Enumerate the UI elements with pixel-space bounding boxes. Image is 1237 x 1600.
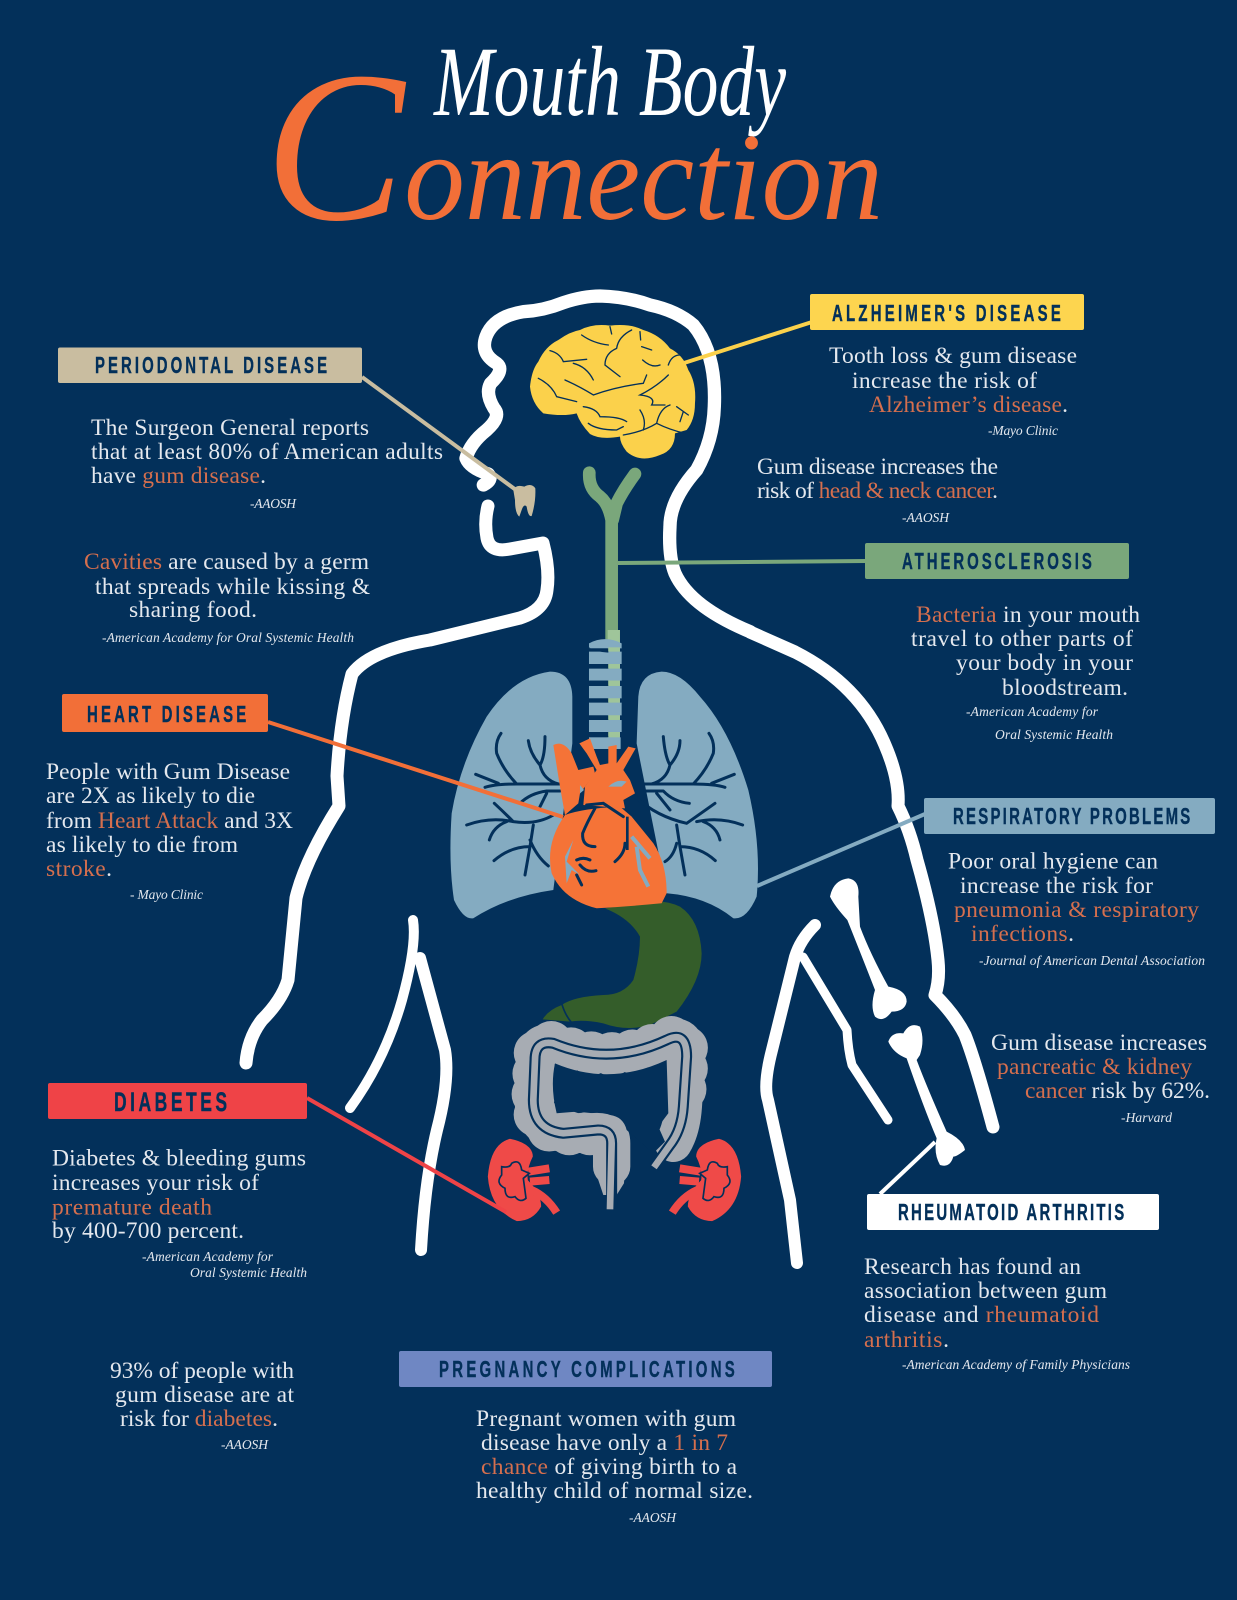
text: pancreatic and kidney cancer bbox=[991, 1030, 1210, 1125]
text: bacteria: your body in your bbox=[956, 650, 1133, 676]
text: head and neck cancer: risk of head & neck cancer. bbox=[757, 478, 998, 504]
text: premature death: premature death bbox=[52, 1194, 212, 1220]
text: bacteria: -American Academy for bbox=[966, 704, 1099, 719]
text: rheumatoid research: -American Academy of Family Physicians bbox=[902, 1357, 1130, 1372]
label: atherosclerosis bbox=[865, 543, 1129, 579]
text: tooth loss bbox=[829, 343, 1077, 438]
text: risk for diabetes: risk for diabetes. bbox=[120, 1406, 278, 1432]
text: rheumatoid research bbox=[864, 1254, 1130, 1372]
text: pregnancy: chance of giving birth to a bbox=[481, 1454, 738, 1480]
icon: bones bbox=[830, 878, 965, 1166]
icon: artery bbox=[589, 473, 635, 642]
label: heart disease bbox=[62, 694, 268, 732]
text: pregnancy: -AAOSH bbox=[629, 1510, 677, 1525]
text: heart attack: are 2X as likely to die bbox=[46, 783, 255, 809]
text: rheumatoid research: association between gum bbox=[864, 1278, 1107, 1304]
icon: stomach bbox=[543, 901, 702, 1028]
text: bacteria: travel to other parts of bbox=[911, 626, 1133, 652]
text: heart attack: People with Gum Disease bbox=[46, 759, 290, 785]
text: premature death: Diabetes & bleeding gums bbox=[52, 1146, 306, 1172]
text: bacteria bbox=[911, 602, 1140, 742]
text: pancreatic and kidney cancer: cancer risk by 62%. bbox=[1025, 1078, 1210, 1104]
label: diabetes: DIABETES bbox=[114, 1086, 227, 1117]
label: respiratory problems bbox=[924, 798, 1215, 834]
text: cavities: sharing food. bbox=[129, 597, 257, 623]
text: surgeon general: that at least 80% of American adults bbox=[91, 439, 443, 465]
text: pregnancy: disease have only a 1 in 7 bbox=[481, 1430, 728, 1456]
text: oral hygiene: increase the risk for bbox=[960, 873, 1153, 899]
text: oral hygiene bbox=[948, 848, 1205, 968]
icon: trachea bbox=[589, 630, 622, 749]
text: pregnancy bbox=[476, 1406, 753, 1525]
text: rheumatoid research: disease and rheumatoid bbox=[864, 1302, 1099, 1328]
label: periodontal disease bbox=[58, 348, 362, 383]
body outline bbox=[246, 296, 993, 1263]
icon: left kidney bbox=[487, 1138, 557, 1222]
connector: diabetes bbox=[307, 1098, 506, 1212]
label: alzheimer's disease bbox=[810, 294, 1084, 330]
connector: rheumatoid arthritis bbox=[880, 1142, 935, 1194]
label: atherosclerosis: ATHEROSCLEROSIS bbox=[902, 549, 1092, 575]
label: pregnancy complications: PREGNANCY COMPLICATIONS bbox=[439, 1357, 735, 1383]
text: rheumatoid research: arthritis. bbox=[864, 1327, 949, 1353]
text: risk for diabetes: -AAOSH bbox=[221, 1437, 269, 1452]
text: tooth loss: Tooth loss & gum disease bbox=[829, 343, 1077, 369]
text: head and neck cancer bbox=[757, 454, 998, 525]
text: tooth loss: Alzheimer’s disease. bbox=[869, 392, 1068, 418]
text: heart attack: from Heart Attack and 3X bbox=[46, 808, 293, 834]
icon: right kidney bbox=[672, 1138, 742, 1222]
label: diabetes bbox=[48, 1083, 307, 1119]
text: tooth loss: increase the risk of bbox=[852, 368, 1037, 394]
text: surgeon general: -AAOSH bbox=[250, 496, 297, 511]
text: pregnancy: Pregnant women with gum bbox=[476, 1406, 736, 1432]
text: bacteria: Oral Systemic Health bbox=[995, 727, 1113, 742]
text: bacteria: Bacteria in your mouth bbox=[916, 602, 1140, 628]
text: oral hygiene: pneumonia & respiratory bbox=[954, 897, 1199, 923]
text: oral hygiene: -Journal of American Dental Association bbox=[979, 953, 1205, 968]
label: respiratory problems: RESPIRATORY PROBLEMS bbox=[953, 804, 1190, 830]
label: rheumatoid arthritis: RHEUMATOID ARTHRITIS bbox=[898, 1200, 1124, 1226]
text: cavities: that spreads while kissing & bbox=[95, 574, 370, 600]
text: heart attack bbox=[46, 759, 293, 902]
text: oral hygiene: Poor oral hygiene can bbox=[948, 848, 1158, 874]
text: premature death: Oral Systemic Health bbox=[190, 1265, 307, 1280]
connector: heart disease bbox=[268, 722, 563, 817]
connector: alzheimer's bbox=[684, 322, 812, 363]
label: rheumatoid arthritis bbox=[867, 1194, 1159, 1230]
label: pregnancy complications bbox=[399, 1351, 772, 1387]
label: alzheimer's disease: ALZHEIMER'S DISEASE bbox=[832, 301, 1061, 327]
text: premature death: increases your risk of bbox=[52, 1170, 259, 1196]
connector: atherosclerosis bbox=[618, 561, 866, 563]
label: periodontal disease: PERIODONTAL DISEASE bbox=[95, 353, 327, 379]
text: heart attack: - Mayo Clinic bbox=[130, 887, 203, 902]
title: Mouth Body bbox=[433, 26, 786, 137]
text: pregnancy: healthy child of normal size. bbox=[476, 1478, 753, 1504]
text: surgeon general: The Surgeon General reports bbox=[91, 415, 369, 441]
icon: colon bbox=[533, 1037, 687, 1209]
text: risk for diabetes: gum disease are at bbox=[115, 1382, 294, 1408]
label: heart disease: HEART DISEASE bbox=[87, 702, 246, 728]
text: tooth loss: -Mayo Clinic bbox=[988, 423, 1058, 438]
title: Connection bbox=[265, 27, 883, 266]
connector: respiratory bbox=[757, 814, 925, 886]
icon: tooth bbox=[513, 485, 535, 517]
text: premature death: by 400-700 percent. bbox=[52, 1218, 244, 1244]
text: heart attack: as likely to die from bbox=[46, 832, 238, 858]
text: pancreatic and kidney cancer: Gum disease increases bbox=[991, 1030, 1207, 1056]
icon: heart bbox=[550, 738, 667, 908]
text: heart attack: stroke. bbox=[46, 856, 112, 882]
text: head and neck cancer: -AAOSH bbox=[902, 510, 950, 525]
text: pancreatic and kidney cancer: pancreatic & kidney bbox=[997, 1054, 1192, 1080]
text: premature death bbox=[52, 1146, 307, 1280]
text: cavities: Cavities are caused by a germ bbox=[84, 549, 369, 575]
text: head and neck cancer: Gum disease increases the bbox=[757, 454, 998, 480]
text: pancreatic and kidney cancer: -Harvard bbox=[1121, 1110, 1172, 1125]
connector: periodontal bbox=[362, 377, 516, 490]
icon: lungs bbox=[450, 630, 758, 918]
text: rheumatoid research: Research has found an bbox=[864, 1254, 1081, 1280]
text: cavities bbox=[84, 549, 370, 645]
text: bacteria: bloodstream. bbox=[1002, 675, 1128, 701]
text: cavities: -American Academy for Oral Systemic Health bbox=[102, 630, 354, 645]
text: surgeon general: have gum disease. bbox=[91, 463, 266, 489]
text: premature death: -American Academy for bbox=[142, 1249, 274, 1264]
icon: brain bbox=[530, 325, 695, 458]
text: oral hygiene: infections. bbox=[971, 921, 1074, 947]
text: risk for diabetes: 93% of people with bbox=[110, 1358, 294, 1384]
text: risk for diabetes bbox=[110, 1358, 294, 1452]
text: surgeon general bbox=[91, 415, 443, 511]
